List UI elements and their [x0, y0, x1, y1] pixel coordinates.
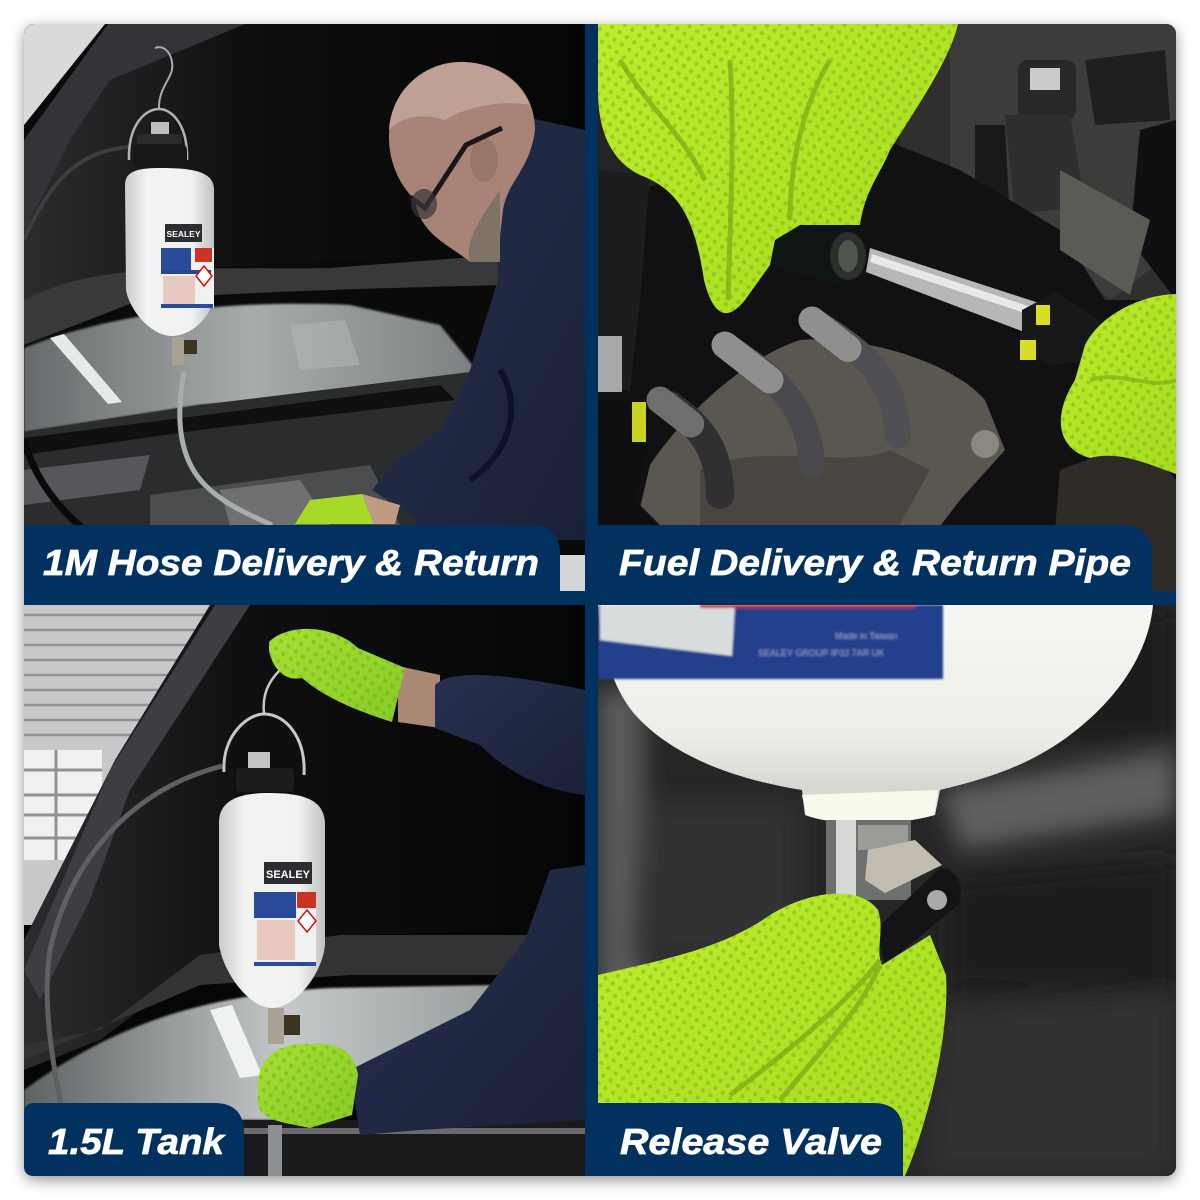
- banner: 1.5L Tank: [24, 1103, 244, 1176]
- icon: tank bottle: [219, 752, 325, 1176]
- hose: [47, 766, 222, 1110]
- metal pipes: [660, 320, 898, 495]
- tank label: Made in Taiwan: [835, 631, 897, 641]
- banner: 1M Hose Delivery and Return: [24, 525, 585, 605]
- lower arm and glove: [258, 865, 585, 1135]
- windscreen: [24, 304, 478, 432]
- tank bail handle and hook: [224, 714, 304, 775]
- head: [389, 62, 535, 262]
- scuttle and engine bay: [24, 372, 469, 525]
- right glove: [1061, 294, 1176, 474]
- tank label: SEALEY GROUP IP32 7AR UK: [758, 648, 884, 658]
- banner: Release Valve: [585, 1103, 903, 1176]
- hose: [180, 372, 272, 525]
- panel: hose delivery and return photo: [24, 24, 585, 592]
- icon: tank bottle: [125, 122, 214, 365]
- fuel filter housing: [640, 339, 1005, 525]
- icon: tank bottle: SEALEY: [266, 869, 311, 881]
- open bonnet: [24, 24, 498, 345]
- banner: Fuel Delivery and Return Pipe: Fuel Delivery & Return Pipe: [619, 542, 1131, 583]
- hose left: [598, 170, 650, 390]
- panel: tank photo: [24, 605, 585, 1176]
- raised arm and glove: [269, 629, 585, 795]
- panel: fuel pipe photo: [598, 24, 1176, 592]
- workshop wall: [24, 24, 105, 125]
- tank underside: [598, 605, 1153, 822]
- gloved hand: [598, 894, 946, 1176]
- glasses: [410, 128, 502, 208]
- banner: 1M Hose Delivery and Return: 1M Hose Delivery & Return: [43, 542, 539, 583]
- main glove: [598, 24, 958, 313]
- tank bail handle: [129, 109, 187, 160]
- icon: tank bottle: SEALEY: [166, 229, 201, 239]
- hanging hook: [155, 47, 172, 110]
- glove on engine: [295, 494, 374, 524]
- valve: [826, 820, 961, 965]
- banner: 1.5L Tank: 1.5L Tank: [48, 1121, 226, 1162]
- banner: Release Valve: Release Valve: [620, 1121, 882, 1162]
- open bonnet: [24, 605, 308, 1070]
- mechanic: [295, 62, 585, 540]
- engine parts: [598, 24, 1176, 592]
- panel: release valve photo: [598, 605, 1176, 1176]
- connector tool: [830, 232, 1050, 360]
- shutter wall: [24, 605, 214, 925]
- banner: Fuel Delivery and Return Pipe: [585, 525, 1176, 605]
- windscreen: [24, 985, 500, 1120]
- tank label: [598, 605, 943, 679]
